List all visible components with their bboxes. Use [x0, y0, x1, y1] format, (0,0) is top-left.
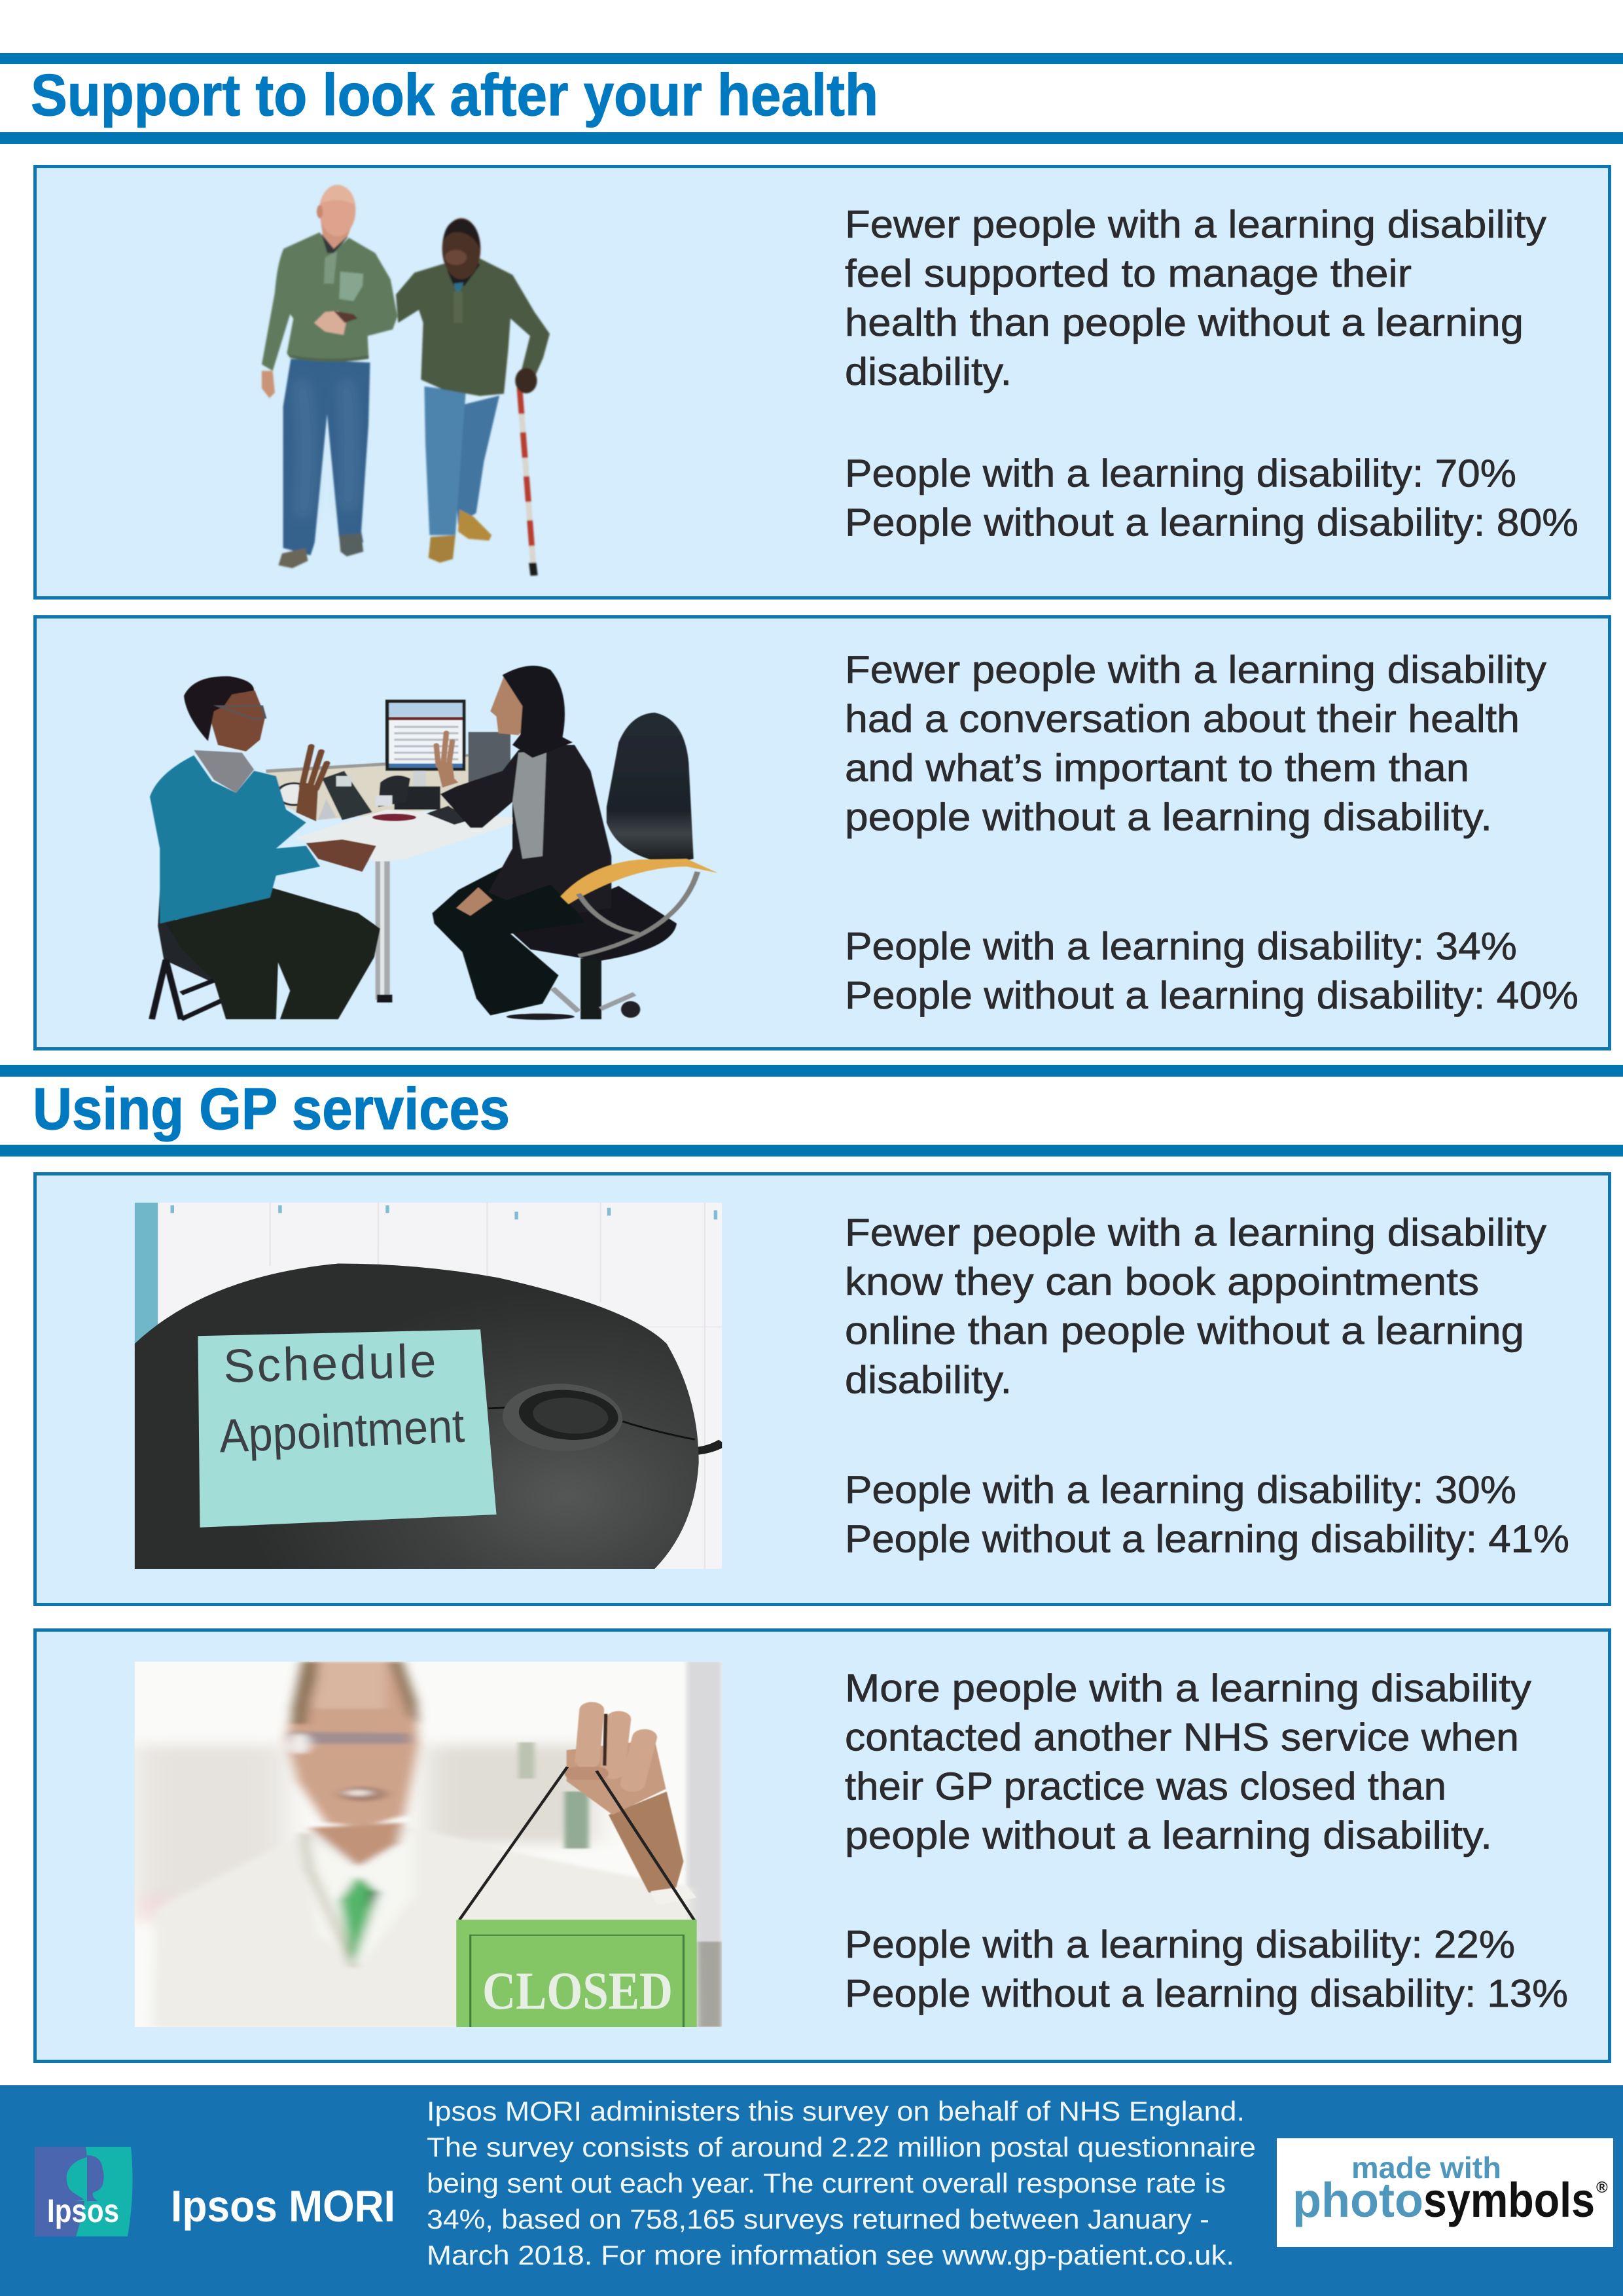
- text: contacting another NHS service: [845, 1666, 1568, 2015]
- text: booking appointments online: know they can book appointments: [845, 1261, 1479, 1304]
- text: booking appointments online: People with a learning disability: 30%: [845, 1469, 1516, 1512]
- text: survey note: March 2018. For more information see www.gp-patient.co.uk.: [427, 2240, 1234, 2270]
- text: contacting another NHS service: People with a learning disability: 22%: [845, 1923, 1515, 1966]
- text: feeling supported to manage health: [845, 203, 1578, 545]
- text: feeling supported to manage health: feel supported to manage their: [845, 252, 1412, 295]
- section: support to look after your health: [0, 53, 1623, 144]
- man in blue jumper: [150, 676, 380, 1019]
- section: using GP services: [0, 1065, 1623, 1157]
- photo: man and woman talking at a GP desk: [150, 666, 718, 1020]
- text: survey note: The survey consists of around 2.22 million postal questionnaire: [427, 2132, 1256, 2162]
- handwritten note text: [218, 1335, 465, 1463]
- text: booking appointments online: People without a learning disability: 41%: [845, 1517, 1569, 1560]
- handwritten note text: Appointment: [218, 1400, 465, 1463]
- photo: computer mouse with appointment note: [135, 1203, 722, 1569]
- text: feeling supported to manage health: health than people without a learning: [845, 301, 1524, 344]
- text: survey note: [427, 2096, 1256, 2270]
- panel: conversation about health: [35, 617, 1610, 1049]
- desk with monitor, phone and computer: [266, 700, 512, 1003]
- footer band: [0, 2085, 1623, 2296]
- text: booking appointments online: [845, 1211, 1569, 1560]
- panel: feeling supported to manage health: [35, 166, 1610, 598]
- logo: made with photosymbols: [1277, 2138, 1613, 2247]
- logo: made with photosymbols: made with: [1351, 2151, 1501, 2185]
- text: conversation about health: Fewer people with a learning disability: [845, 648, 1547, 691]
- wordmark: Ipsos MORI: Ipsos MORI: [171, 2181, 395, 2231]
- text: contacting another NHS service: contacted another NHS service when: [845, 1716, 1519, 1759]
- text: feeling supported to manage health: disability.: [845, 350, 1012, 393]
- text: booking appointments online: online than people without a learning: [845, 1309, 1524, 1352]
- closed sign text: CLOSED: [482, 1961, 673, 2020]
- heading: using GP services: Using GP services: [33, 1077, 510, 1142]
- text: conversation about health: and what’s important to them than: [845, 746, 1469, 789]
- text: conversation about health: had a conversation about their health: [845, 698, 1520, 741]
- text: contacting another NHS service: their GP practice was closed than: [845, 1765, 1446, 1808]
- text: survey note: Ipsos MORI administers this survey on behalf of NHS England.: [427, 2096, 1245, 2126]
- handwritten note text: Schedule: [223, 1335, 437, 1393]
- logo: made with photosymbols: photo: [1293, 2173, 1423, 2227]
- man on the right upper body: [396, 218, 550, 396]
- woman in black jacket on office chair: [433, 666, 718, 1020]
- text: feeling supported to manage health: People without a learning disability: 80%: [845, 501, 1578, 545]
- text: survey note: being sent out each year. The current overall response rate is: [427, 2168, 1226, 2198]
- logo: Ipsos: [35, 2147, 133, 2236]
- text: conversation about health: [845, 648, 1578, 1017]
- text: conversation about health: people without a learning disability.: [845, 796, 1492, 839]
- logo: made with photosymbols: symbols: [1423, 2173, 1595, 2227]
- text: booking appointments online: disability.: [845, 1359, 1012, 1402]
- text: contacting another NHS service: People without a learning disability: 13%: [845, 1972, 1568, 2015]
- text: survey note: 34%, based on 758,165 surveys returned between January -: [427, 2204, 1209, 2234]
- text: booking appointments online: Fewer people with a learning disability: [845, 1211, 1547, 1254]
- text: feeling supported to manage health: People with a learning disability: 70%: [845, 452, 1516, 495]
- text: feeling supported to manage health: Fewer people with a learning disability: [845, 203, 1547, 246]
- photo: doctor holding a closed sign: [135, 1662, 722, 2034]
- photo: two men walking arm in arm: [262, 185, 550, 575]
- heading: support to look after your health: Support to look after your health: [31, 63, 878, 128]
- logo: made with photosymbols: ®: [1596, 2179, 1608, 2197]
- man on the left upper body: [262, 185, 397, 398]
- logo: Ipsos: Ipsos: [47, 2193, 119, 2229]
- text: contacting another NHS service: More people with a learning disability: [845, 1666, 1532, 1710]
- panel: contacting another NHS service: [35, 1630, 1610, 2062]
- text: conversation about health: People with a learning disability: 34%: [845, 925, 1517, 968]
- panel: booking appointments online: [35, 1174, 1610, 1605]
- text: contacting another NHS service: people without a learning disability.: [845, 1814, 1492, 1857]
- text: conversation about health: People without a learning disability: 40%: [845, 974, 1578, 1017]
- legs, shoes and walking stick: [278, 359, 534, 575]
